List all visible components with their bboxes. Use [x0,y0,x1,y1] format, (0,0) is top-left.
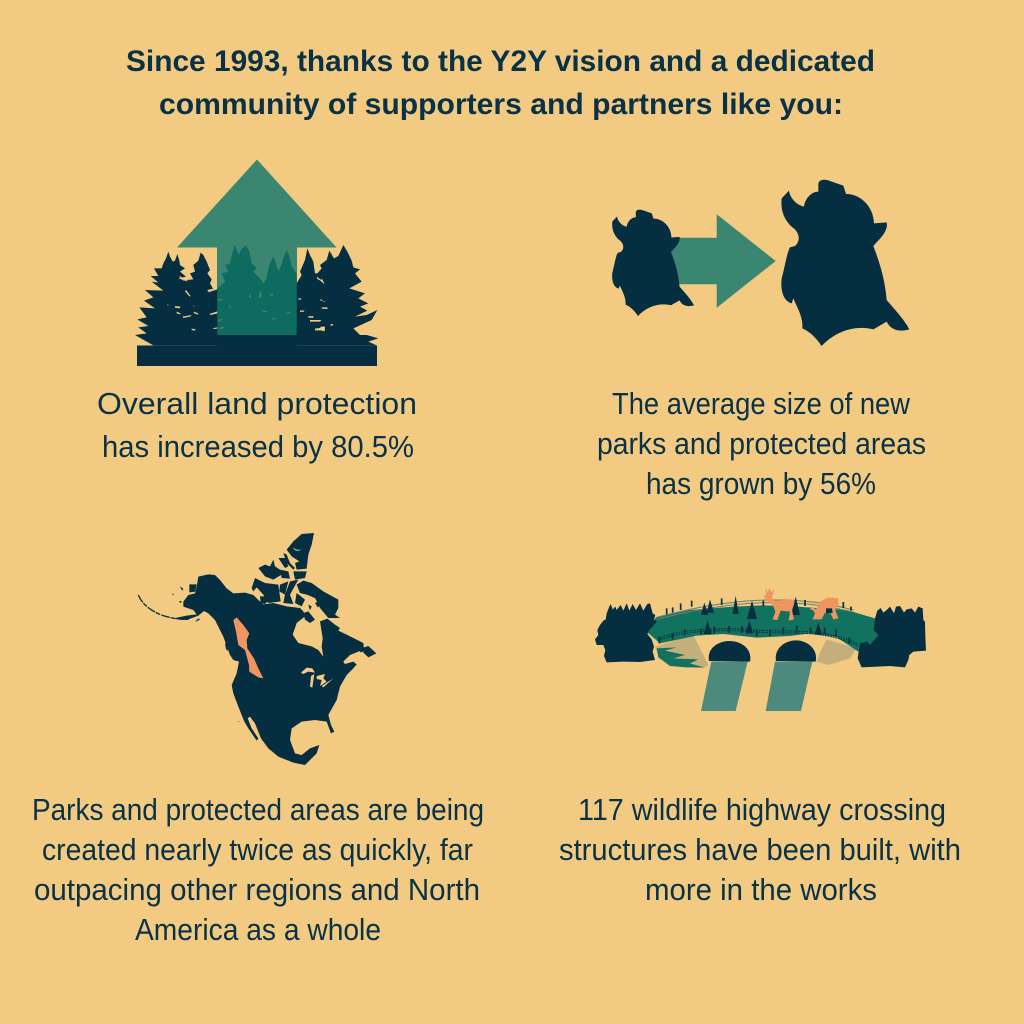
fences [657,598,858,646]
title [126,45,875,121]
deer [763,588,838,621]
text: wildlife crossing [559,792,961,907]
text: park size [597,386,926,501]
road [701,662,812,711]
text: land protection: has increased by 80.5% [102,429,414,464]
tree clusters [595,603,657,662]
text: wildlife crossing: more in the works [645,872,877,907]
text: park size: parks and protected areas [597,426,926,461]
icon: small and large park shapes [612,180,909,346]
tunnels [709,640,816,662]
text: North America map [32,792,484,947]
embankments [655,635,857,668]
icon: right arrow [660,214,776,308]
text: park size: The average size of new [612,386,911,421]
small trees [701,596,822,635]
text: park size: has grown by 56% [646,466,876,501]
title: community of supporters and partners like you: [159,88,843,121]
panel: wildlife crossing [559,588,961,907]
panel: park size [597,180,926,501]
icon: wildlife overpass [595,588,926,711]
text: land protection: Overall land protection [97,386,417,421]
icon: North America map with Y2Y region [138,533,376,765]
icon: up arrow over forest [135,160,378,366]
panel: North America map [32,533,484,947]
text: North America map: Parks and protected areas are being [32,792,484,827]
text: North America map: America as a whole [135,912,381,947]
text: land protection [97,386,417,464]
text: North America map: created nearly twice as quickly, far [42,832,473,867]
text: wildlife crossing: structures have been built, with [559,832,961,867]
text: wildlife crossing: 117 wildlife highway crossing [578,792,946,827]
title: Since 1993, thanks to the Y2Y vision and a dedicated [126,45,875,78]
bridge deck [647,605,884,652]
panel: land protection [97,160,417,464]
text: North America map: outpacing other regions and North [34,872,480,907]
